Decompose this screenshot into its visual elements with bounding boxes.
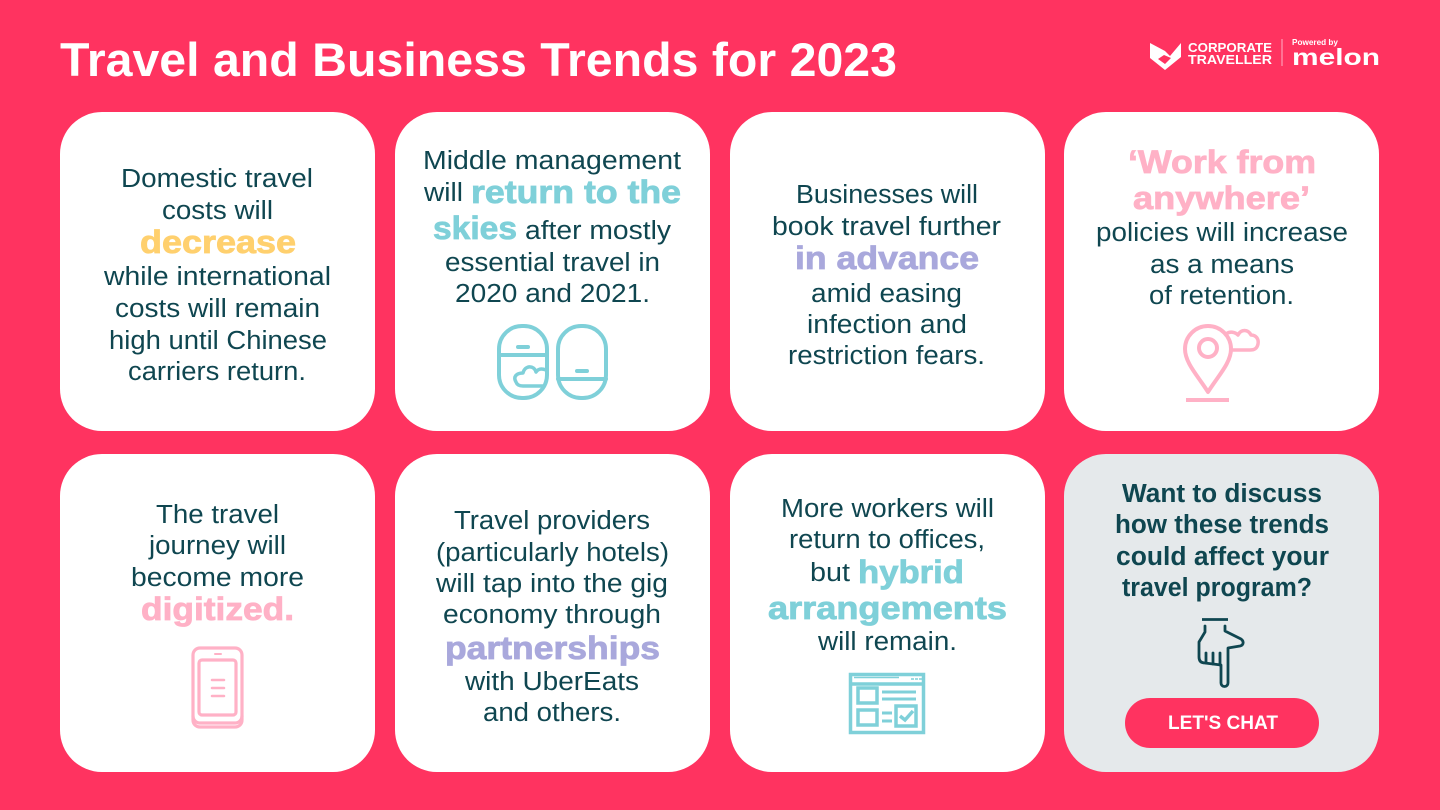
text block: book in advance: in advance xyxy=(795,240,979,276)
text block: digitized journey xyxy=(131,501,304,627)
text block: work from anywhere: of retention. xyxy=(1149,282,1294,310)
text block: gig economy partnerships: and others. xyxy=(483,699,621,727)
text block: digitized journey: journey will xyxy=(148,532,286,560)
text block: call to action question: could affect your xyxy=(1116,543,1329,571)
title: Travel and Business Trends for 2023 xyxy=(60,33,897,86)
text block: hybrid arrangements: arrangements xyxy=(768,590,1007,626)
text block: domestic costs: decrease xyxy=(140,224,296,260)
text block: gig economy partnerships: partnerships xyxy=(445,630,660,666)
text block: domestic costs: high until Chinese xyxy=(109,327,327,355)
text block: middle management: essential travel in xyxy=(445,249,660,277)
text block: domestic costs xyxy=(103,165,331,386)
text block: middle management: Middle management xyxy=(423,147,681,175)
panel: digitized journey xyxy=(60,454,375,772)
text block: call to action question: travel program? xyxy=(1122,574,1312,602)
text block: middle management: return to the xyxy=(471,174,681,210)
text block: book in advance: book travel further xyxy=(772,213,1002,241)
text block: domestic costs: costs will xyxy=(162,197,273,225)
text block: work from anywhere: as a means xyxy=(1150,251,1294,279)
text block: middle management: will xyxy=(423,179,463,207)
panel: book in advance xyxy=(730,112,1045,431)
icon: browser checklist xyxy=(850,674,924,732)
text block: gig economy partnerships: will tap into the gig xyxy=(435,570,668,598)
text block: digitized journey: become more xyxy=(131,564,304,592)
text block: middle management: skies xyxy=(433,210,517,246)
text block: digitized journey: The travel xyxy=(156,501,279,529)
text block: domestic costs: while international xyxy=(103,263,331,291)
logo text: Powered by: Powered by xyxy=(1292,37,1338,47)
icon: airplane windows xyxy=(499,326,606,398)
button: let's chat: LET'S CHAT xyxy=(1168,713,1278,734)
text block: gig economy partnerships: (particularly hotels) xyxy=(436,539,669,567)
text block: hybrid arrangements: will remain. xyxy=(817,628,957,656)
icon: hand pointing down xyxy=(1199,620,1243,687)
logo text: melon: melon xyxy=(1292,44,1380,70)
text block: call to action question: Want to discuss xyxy=(1122,480,1322,508)
text block: middle management: after mostly xyxy=(525,217,671,245)
text block: gig economy partnerships: with UberEats xyxy=(464,668,639,696)
text block: book in advance xyxy=(772,181,1002,370)
text block: middle management: 2020 and 2021. xyxy=(455,280,650,308)
icon: Corporate Traveller mark xyxy=(1150,43,1181,70)
text block: hybrid arrangements: return to offices, xyxy=(789,526,985,554)
panel: work from anywhere xyxy=(1064,112,1379,431)
text block: gig economy partnerships: Travel providers xyxy=(454,507,650,535)
panel: domestic travel costs xyxy=(60,112,375,431)
text block: call to action question xyxy=(1115,480,1329,602)
logo text: Traveller: TRAVELLER xyxy=(1188,53,1272,67)
text block: book in advance: amid easing xyxy=(811,280,962,308)
panel: call to action xyxy=(1064,454,1379,772)
text block: domestic costs: Domestic travel xyxy=(121,165,313,193)
panel: hybrid arrangements xyxy=(730,454,1045,772)
panel: gig economy partnerships xyxy=(395,454,710,772)
logo text: Corporate: CORPORATE xyxy=(1188,41,1272,55)
text block: work from anywhere: ‘Work from xyxy=(1128,144,1316,180)
text block: gig economy partnerships: economy through xyxy=(443,601,661,629)
text block: hybrid arrangements: but xyxy=(810,559,850,587)
button: let's chat xyxy=(1125,698,1319,748)
text block: digitized journey: digitized. xyxy=(141,591,294,627)
logo: Corporate Traveller powered by Melon xyxy=(1150,37,1380,70)
text block: work from anywhere: anywhere’ xyxy=(1133,180,1310,216)
text block: hybrid arrangements: hybrid xyxy=(858,554,964,590)
icon: smartphone xyxy=(193,648,242,727)
text block: hybrid arrangements xyxy=(768,495,1007,656)
text block: work from anywhere xyxy=(1096,144,1348,310)
text block: middle management xyxy=(423,147,681,308)
text block: domestic costs: carriers return. xyxy=(128,358,306,386)
text block: domestic costs: costs will remain xyxy=(115,295,320,323)
icon: map pin with cloud xyxy=(1185,326,1258,400)
text block: hybrid arrangements: More workers will xyxy=(781,495,994,523)
text block: book in advance: Businesses will xyxy=(796,181,978,209)
text block: call to action question: how these trends xyxy=(1115,511,1329,539)
text block: gig economy partnerships xyxy=(435,507,669,727)
panel: middle management xyxy=(395,112,710,431)
text block: book in advance: infection and xyxy=(807,311,967,339)
text block: work from anywhere: policies will increase xyxy=(1096,219,1348,247)
text block: book in advance: restriction fears. xyxy=(788,342,985,370)
